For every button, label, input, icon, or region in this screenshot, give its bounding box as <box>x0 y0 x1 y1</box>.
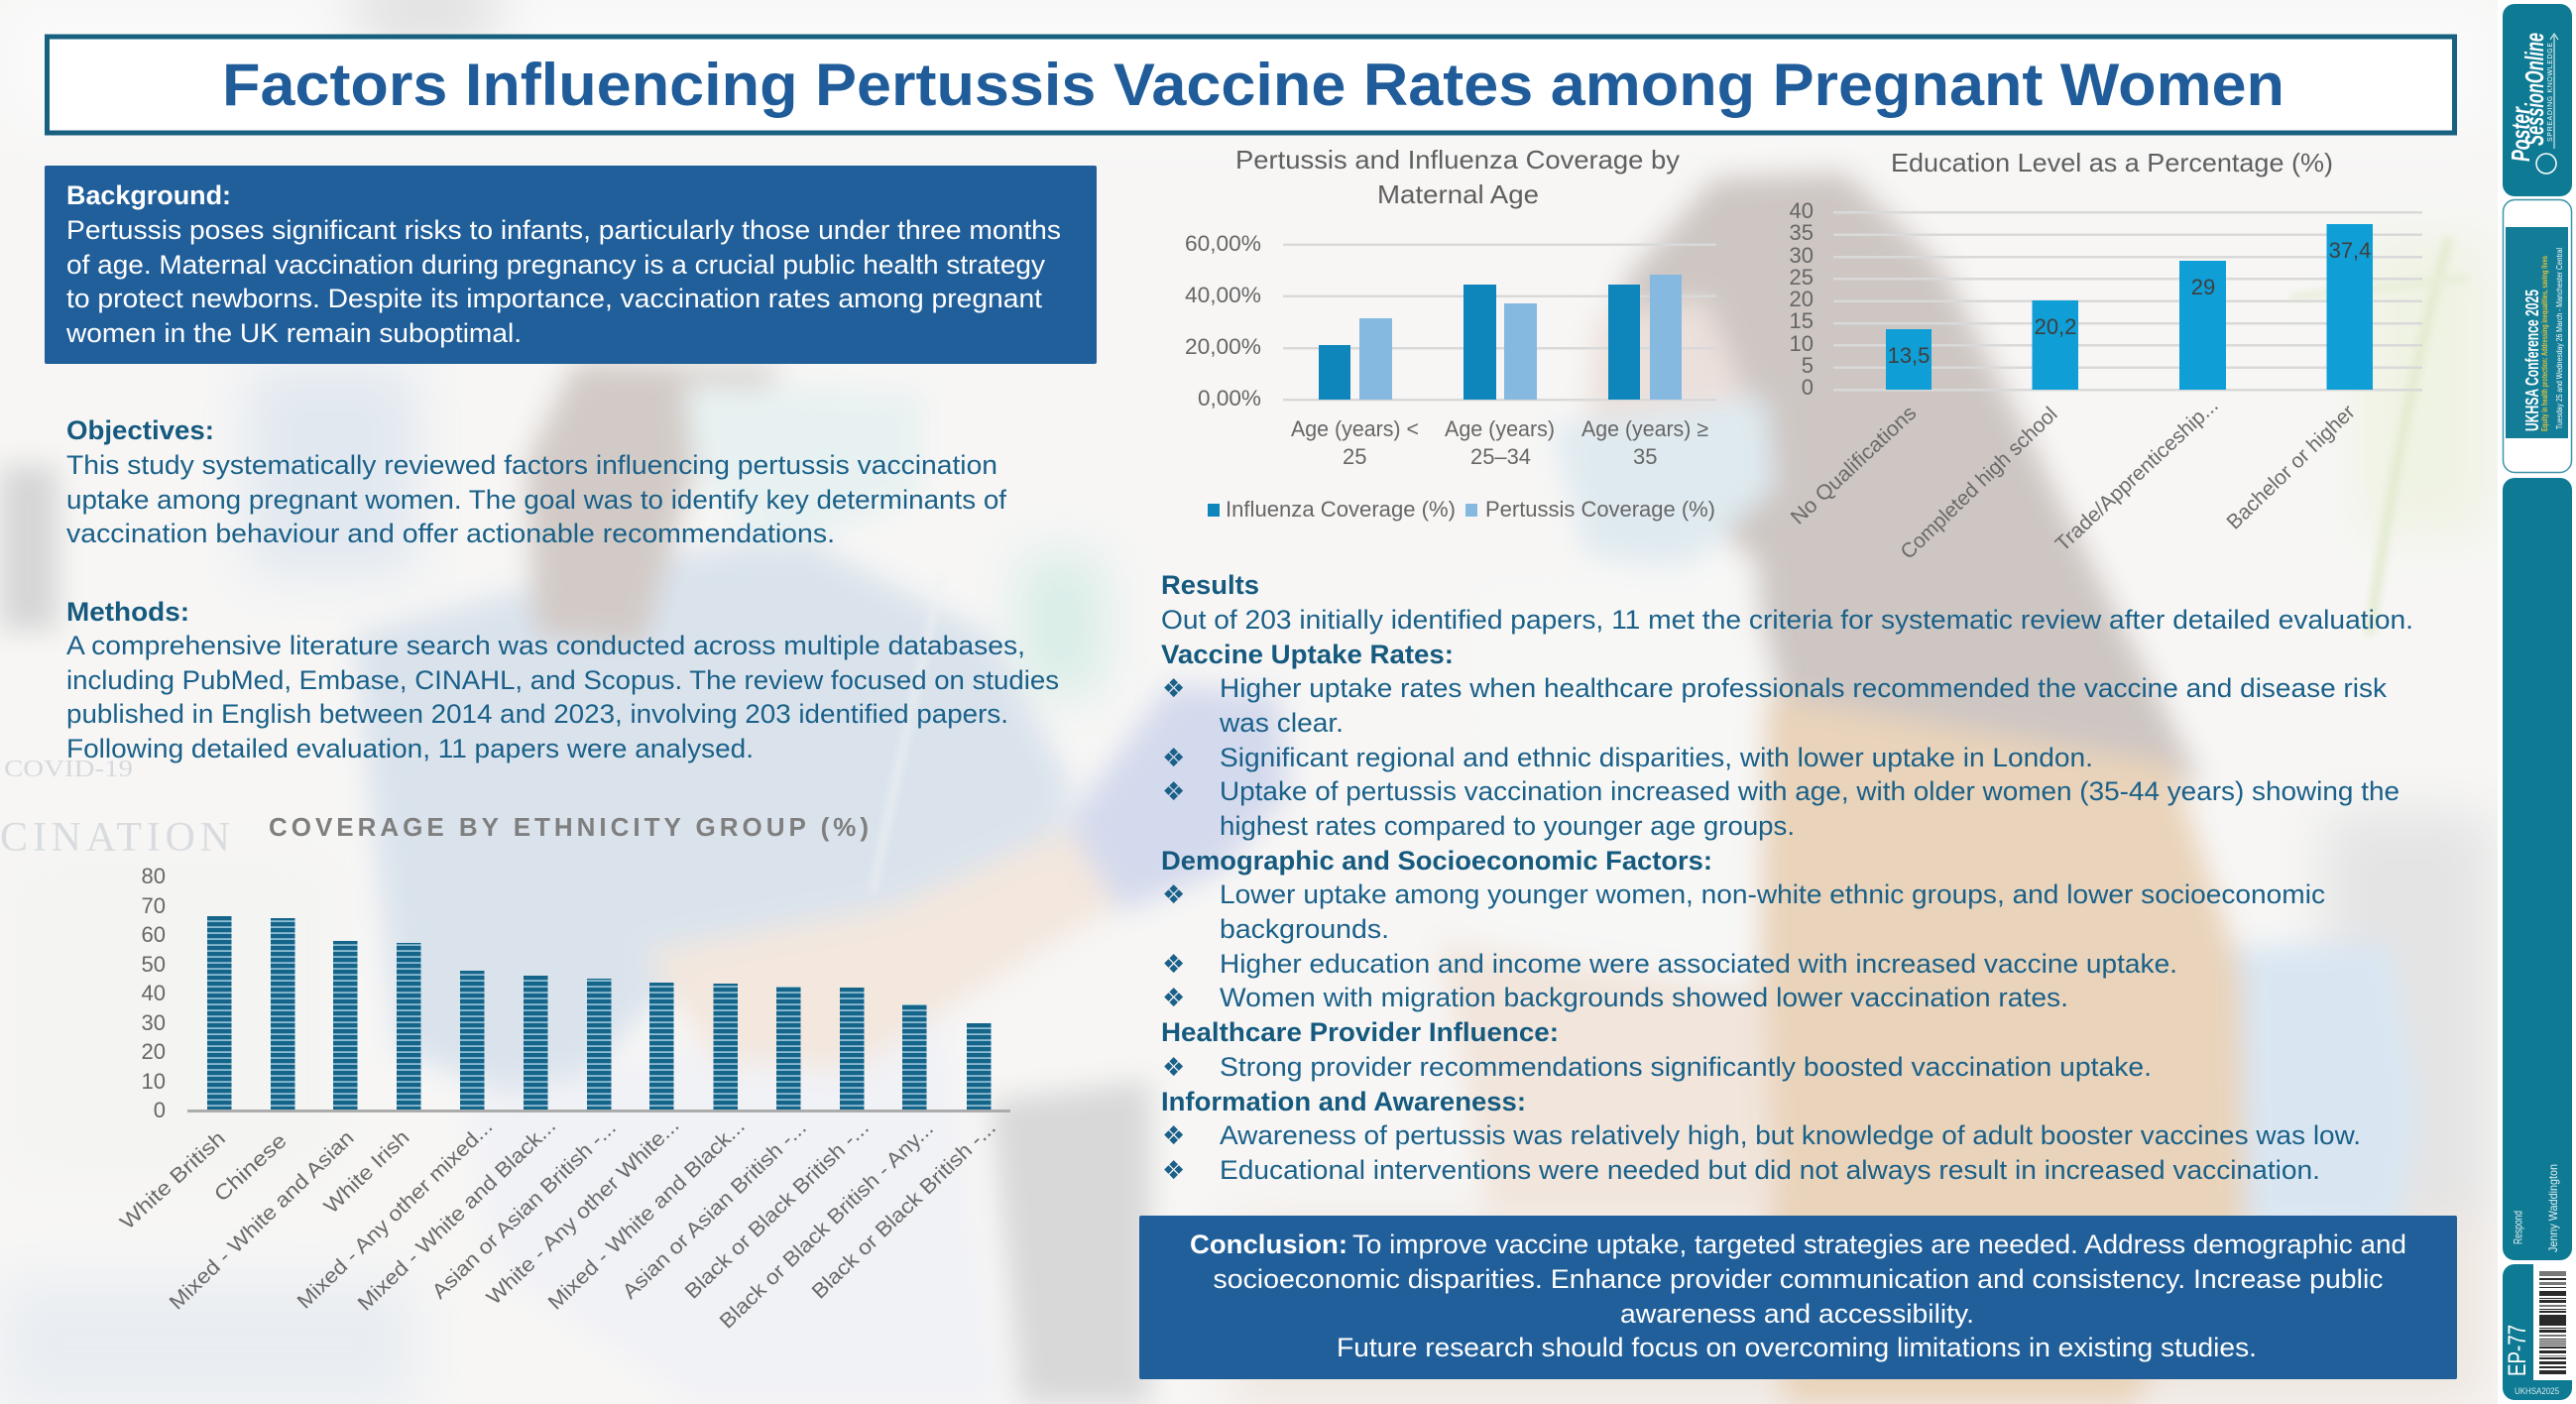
text block: methods: Methods: <box>66 597 189 627</box>
subsection: vaccine uptake rates: Significant regional and ethnic disparities, with lower uptake in London. <box>1220 743 2093 772</box>
presenter panel: Jenny Waddington <box>2546 1164 2560 1252</box>
y axis labels: 0 <box>1802 375 1814 400</box>
subsection: demographic and socioeconomic factors <box>1161 846 2325 1013</box>
title banner: Factors Influencing Pertussis Vaccine Rates among Pregnant Women <box>222 52 2284 118</box>
subsection: demographic and socioeconomic factors: Lower uptake among younger women, non-white ethnic groups, and lower socioeconomic <box>1220 879 2325 909</box>
y axis labels: 20 <box>1790 287 1814 311</box>
y axis labels: 50 <box>142 952 166 977</box>
y axis labels: 15 <box>1790 308 1814 333</box>
subsection: demographic and socioeconomic factors: ❖ <box>1162 984 1185 1013</box>
subsection: vaccine uptake rates: Higher uptake rates when healthcare professionals recommended the vaccine and disease risk <box>1220 673 2388 703</box>
panel: conclusion: Conclusion: <box>1190 1229 1347 1259</box>
panel: background: of age. Maternal vaccination during pregnancy is a crucial public health strategy <box>66 250 1046 280</box>
subsection: vaccine uptake rates: ❖ <box>1162 674 1185 704</box>
subsection: healthcare provider influence <box>1161 1017 2152 1083</box>
y axis labels: 60 <box>142 922 166 947</box>
text block: methods: published in English between 2014 and 2023, involving 203 identified papers. <box>66 699 1008 729</box>
y axis labels: 40 <box>142 981 166 1005</box>
bars <box>1886 224 2373 390</box>
panel: conclusion: awareness and accessibility. <box>1620 1299 1974 1329</box>
bar chart: coverage by maternal age <box>1185 145 1716 522</box>
panel: conclusion: socioeconomic disparities. Enhance provider communication and consistency. Increase public <box>1214 1264 2384 1294</box>
text block: objectives: This study systematically reviewed factors influencing pertussis vaccination <box>66 450 997 480</box>
panel: background: Background: <box>66 180 231 210</box>
data labels: 37,4 <box>2329 238 2371 263</box>
panel: conclusion: To improve vaccine uptake, targeted strategies are needed. Address demographic and <box>1352 1229 2406 1259</box>
subsection: information and awareness: ❖ <box>1162 1156 1185 1186</box>
category labels: White - Any other White... <box>482 1113 684 1310</box>
category labels <box>116 1113 1000 1334</box>
conference panel: UKHSA Conference 2025 <box>2503 200 2572 472</box>
text block: results: Results <box>1161 570 1259 600</box>
legend: Pertussis Coverage (%) <box>1485 497 1715 522</box>
bar chart: education level <box>1787 148 2422 564</box>
data labels: 20,2 <box>2035 314 2076 339</box>
legend: Influenza Coverage (%) <box>1226 497 1456 522</box>
subsection: demographic and socioeconomic factors: ❖ <box>1162 880 1185 910</box>
chart title: Maternal Age <box>1377 179 1539 209</box>
x axis labels: 25 <box>1343 444 1366 469</box>
panel: background <box>45 166 1097 364</box>
gridlines <box>1833 211 2422 391</box>
text block: results: Out of 203 initially identified papers, 11 met the criteria for systematic review after detailed evaluation. <box>1161 605 2413 635</box>
subsection: information and awareness: Awareness of pertussis was relatively high, but knowledge of adult booster vaccines was low. <box>1220 1120 2361 1150</box>
category labels: Completed high school <box>1896 403 2062 564</box>
category labels: Asian or Asian British -... <box>618 1116 811 1304</box>
subsection: information and awareness: ❖ <box>1162 1121 1185 1151</box>
category labels: Black or Black British - Any... <box>715 1117 938 1334</box>
y axis labels: 80 <box>142 864 166 888</box>
barcode <box>2539 1271 2566 1374</box>
y axis labels <box>1790 198 1814 400</box>
category labels: Bachelor or higher <box>2222 401 2360 534</box>
x axis labels: 25–34 <box>1470 444 1531 469</box>
subsection: demographic and socioeconomic factors: Women with migration backgrounds showed lower vaccination rates. <box>1220 983 2068 1012</box>
logo panel: PosterSessionOnline: SPREADING KNOWLEDGE <box>2547 43 2554 142</box>
panel: conclusion: Future research should focus on overcoming limitations in existing studies. <box>1337 1333 2257 1362</box>
category labels: Chinese <box>210 1129 292 1207</box>
panel: background: to protect newborns. Despite its importance, vaccination rates among pregnant <box>66 284 1043 313</box>
legend <box>1208 497 1715 522</box>
category labels: Mixed - White and Asian <box>165 1126 359 1315</box>
category labels: Black or Black British -... <box>680 1116 874 1304</box>
influenza bars <box>1319 285 1640 400</box>
data labels <box>1888 238 2371 368</box>
chart title: COVERAGE BY ETHNICITY GROUP (%) <box>269 812 869 842</box>
category labels: Mixed - White and Black... <box>543 1114 750 1315</box>
data labels: 13,5 <box>1888 343 1930 368</box>
panel: conclusion <box>1139 1216 2457 1379</box>
category labels: White British <box>116 1127 230 1234</box>
x axis labels: Age (years) ≥ <box>1581 416 1708 441</box>
conference panel: UKHSA Conference 2025: Equity in health protection: Addressing inequalities, saving lives <box>2540 256 2549 431</box>
category labels <box>1787 394 2360 564</box>
category labels: Mixed - White and Black... <box>353 1114 560 1316</box>
y axis labels: 0 <box>154 1098 166 1122</box>
chart title: Pertussis and Influenza Coverage by <box>1235 145 1680 175</box>
logo panel: PosterSessionOnline: Poster <box>2506 106 2535 162</box>
text block: objectives: Objectives: <box>66 415 214 445</box>
subsection: vaccine uptake rates: highest rates compared to younger age groups. <box>1220 811 1795 841</box>
subsection: healthcare provider influence: Healthcare Provider Influence: <box>1161 1017 1559 1047</box>
category labels: Trade/Apprenticeship... <box>2051 394 2223 556</box>
chart title <box>1235 145 1680 209</box>
background photo: nurse vaccinating pregnant woman (faded): CINATION <box>0 815 230 861</box>
y axis labels: 40 <box>1790 198 1814 223</box>
poster id panel with barcode: UKHSA2025 <box>2515 1386 2559 1397</box>
presenter panel <box>2503 478 2572 1260</box>
logo panel: PosterSessionOnline <box>2503 4 2572 196</box>
panel: background: Pertussis poses significant risks to infants, particularly those under three months <box>66 215 1061 245</box>
y axis labels: 25 <box>1790 265 1814 290</box>
chart title: Education Level as a Percentage (%) <box>1891 148 2333 177</box>
y axis labels: 60,00% <box>1185 231 1261 256</box>
category labels: Mixed - Any other mixed... <box>293 1115 497 1314</box>
subsection: information and awareness <box>1161 1087 2361 1186</box>
conference panel: UKHSA Conference 2025: Tuesday 25 and Wednesday 26 March - Manchester Central <box>2555 248 2564 429</box>
text block: methods <box>66 597 1059 763</box>
y axis labels: 10 <box>1790 331 1814 356</box>
text block: methods: Following detailed evaluation, 11 papers were analysed. <box>66 734 754 763</box>
subsection: vaccine uptake rates: ❖ <box>1162 744 1185 773</box>
y axis labels: 5 <box>1802 353 1814 378</box>
category labels: White Irish <box>319 1126 414 1219</box>
text block: objectives: vaccination behaviour and offer actionable recommendations. <box>66 519 835 548</box>
panel: background: women in the UK remain suboptimal. <box>65 318 522 348</box>
y axis labels: 10 <box>142 1069 166 1094</box>
y axis labels: 70 <box>142 893 166 918</box>
y axis labels <box>142 864 166 1122</box>
subsection: demographic and socioeconomic factors: Higher education and income were associated with increased vaccine uptake. <box>1220 949 2177 979</box>
pertussis bars <box>1359 275 1682 400</box>
sidebar <box>2498 0 2576 1404</box>
category labels: No Qualifications <box>1787 402 1921 529</box>
text block: results <box>1161 570 2413 1186</box>
bars <box>207 916 992 1111</box>
x axis labels: 35 <box>1633 444 1657 469</box>
presenter panel: Respond <box>2511 1211 2524 1244</box>
subsection: vaccine uptake rates: was clear. <box>1219 708 1344 738</box>
conference panel: UKHSA Conference 2025: UKHSA Conference 2025 <box>2522 290 2542 431</box>
x axis labels: Age (years) < <box>1291 416 1419 441</box>
poster id panel with barcode <box>2503 1264 2572 1400</box>
y axis labels: 0,00% <box>1198 386 1261 410</box>
subsection: healthcare provider influence: ❖ <box>1162 1053 1185 1083</box>
subsection: demographic and socioeconomic factors: Demographic and Socioeconomic Factors: <box>1161 846 1712 876</box>
subsection: healthcare provider influence: Strong provider recommendations significantly boosted vaccination uptake. <box>1220 1052 2152 1082</box>
subsection: vaccine uptake rates: Vaccine Uptake Rates: <box>1161 640 1454 669</box>
x axis labels: Age (years) <box>1445 416 1555 441</box>
y axis labels: 40,00% <box>1185 283 1261 307</box>
subsection: demographic and socioeconomic factors: ❖ <box>1162 950 1185 980</box>
text block: objectives <box>66 415 1007 548</box>
text block: methods: A comprehensive literature search was conducted across multiple databases, <box>66 631 1025 660</box>
text block: methods: including PubMed, Embase, CINAHL, and Scopus. The review focused on studies <box>66 665 1059 695</box>
subsection: vaccine uptake rates: ❖ <box>1162 777 1185 807</box>
subsection: demographic and socioeconomic factors: backgrounds. <box>1220 914 1389 944</box>
text block: objectives: uptake among pregnant women. The goal was to identify key determinants of <box>66 485 1007 515</box>
y axis labels: 35 <box>1790 220 1814 245</box>
category labels: Black or Black British -... <box>807 1116 1000 1304</box>
poster id panel with barcode: EP-77 <box>2504 1325 2531 1376</box>
bar chart: coverage by ethnicity <box>116 812 1010 1334</box>
data labels: 29 <box>2191 275 2215 299</box>
background photo: nurse vaccinating pregnant woman (faded): COVID-19 <box>4 757 133 782</box>
y axis labels: 20,00% <box>1185 334 1261 359</box>
y axis labels: 30 <box>1790 243 1814 268</box>
y axis labels: 30 <box>142 1010 166 1035</box>
y axis labels <box>1185 231 1261 410</box>
subsection: information and awareness: Educational interventions were needed but did not always result in increased vaccination. <box>1220 1155 2320 1185</box>
gridlines <box>1283 244 1716 401</box>
y axis labels: 20 <box>142 1039 166 1064</box>
title banner <box>48 37 2455 133</box>
category labels: Asian or Asian British -... <box>427 1116 621 1304</box>
subsection: vaccine uptake rates: Uptake of pertussis vaccination increased with age, with older women (35-44 years) showing the <box>1220 776 2400 806</box>
subsection: vaccine uptake rates <box>1161 640 2400 841</box>
x axis labels <box>1291 416 1708 469</box>
subsection: information and awareness: Information and Awareness: <box>1161 1087 1526 1116</box>
